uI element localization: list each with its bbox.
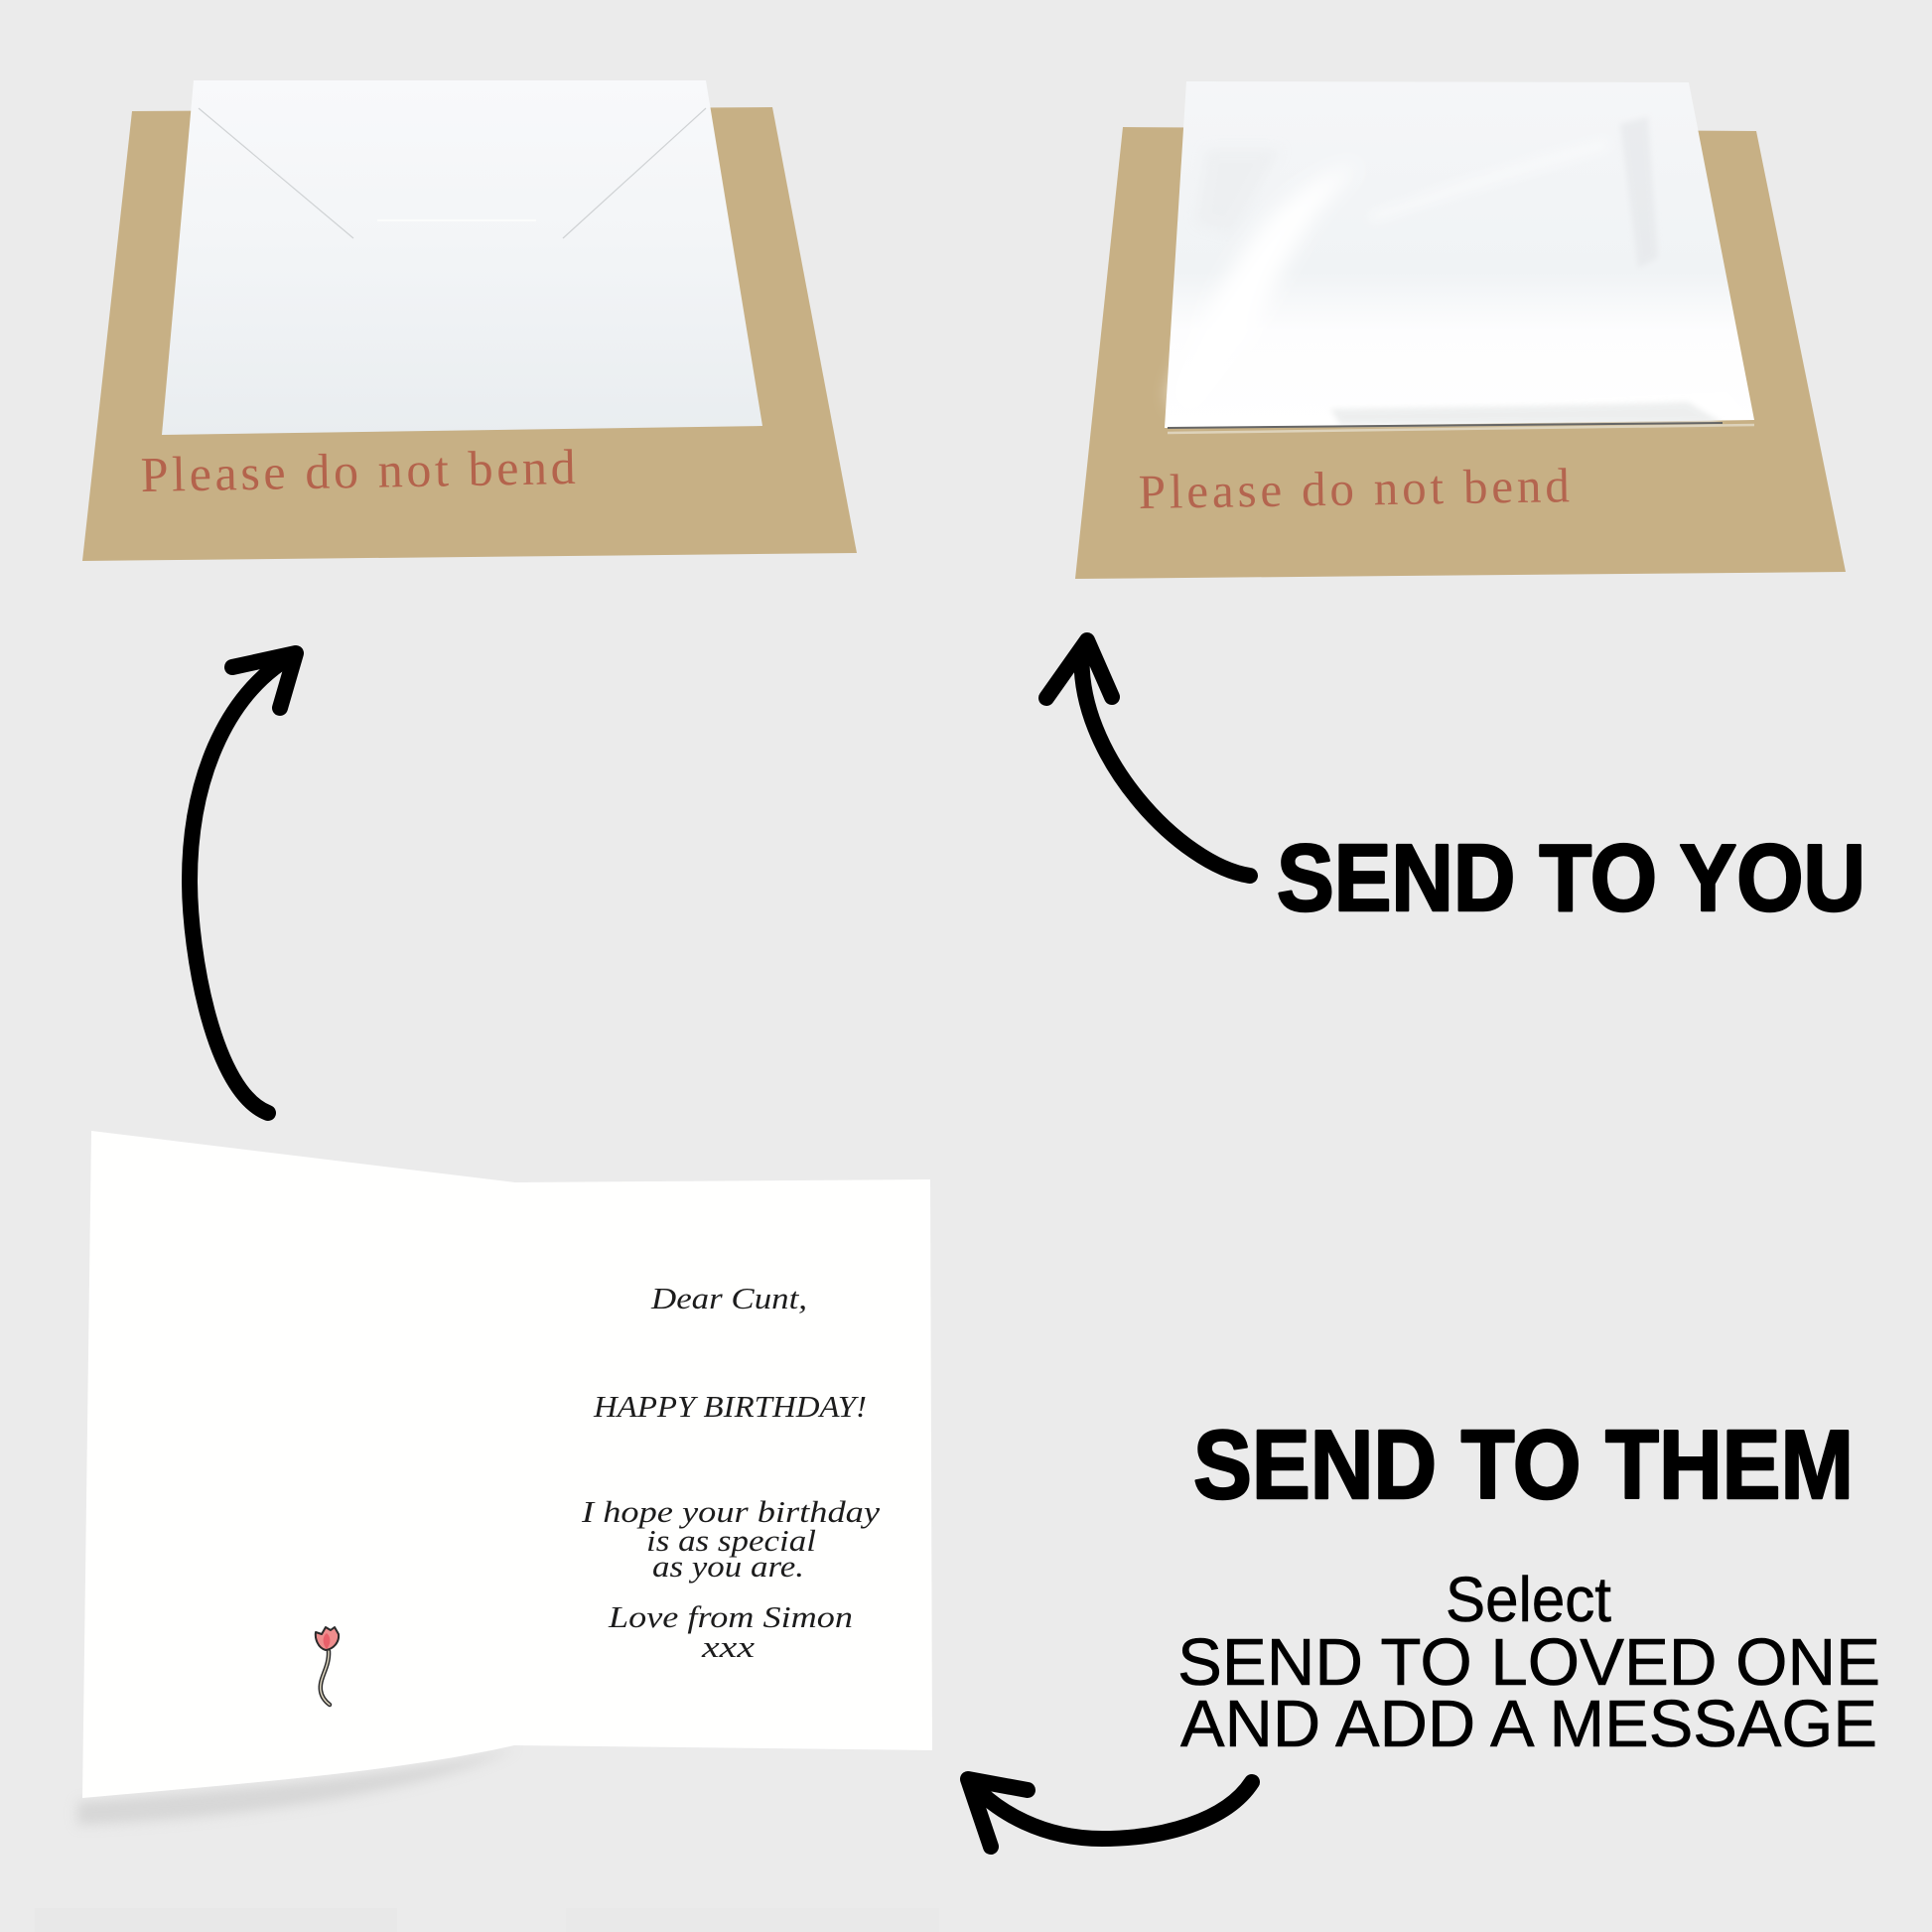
arrow: instructions to card — [968, 1779, 1252, 1847]
panel: open greeting card — [77, 1131, 932, 1825]
kraft backing board — [82, 107, 857, 561]
card message — [581, 1281, 880, 1664]
arrow: send to you up to envelope — [1046, 640, 1250, 876]
card message: as you are. — [652, 1549, 804, 1584]
panel: kraft envelope with white envelope — [82, 80, 857, 561]
cellophane wrapped card — [1165, 81, 1754, 433]
heading: send to you: SEND TO YOU — [1277, 825, 1865, 931]
instructions text: SEND TO LOVED ONE — [1177, 1625, 1880, 1700]
card message: Love from Simon — [608, 1599, 853, 1634]
heading: send to them: SEND TO THEM — [1193, 1410, 1854, 1519]
card message: xxx — [701, 1629, 755, 1664]
card paper — [82, 1131, 932, 1798]
card message: HAPPY BIRTHDAY! — [593, 1389, 867, 1424]
printed text: please do not bend: Please do not bend — [1138, 458, 1570, 519]
instructions text — [1177, 1564, 1880, 1761]
icon: small tulip — [316, 1627, 339, 1705]
card shadow — [77, 1747, 516, 1825]
printed text: please do not bend: Please do not bend — [140, 439, 576, 502]
instructions text: AND ADD A MESSAGE — [1180, 1687, 1877, 1761]
instructions text: Select — [1446, 1564, 1611, 1635]
kraft backing board — [1075, 127, 1846, 579]
white envelope — [162, 80, 762, 435]
panel: kraft envelope with cello-wrapped card — [1075, 81, 1846, 579]
card message: I hope your birthday — [581, 1494, 880, 1529]
card message: Dear Cunt, — [650, 1281, 807, 1315]
arrow: card up to first envelope — [190, 653, 296, 1113]
card message: is as special — [646, 1523, 816, 1558]
